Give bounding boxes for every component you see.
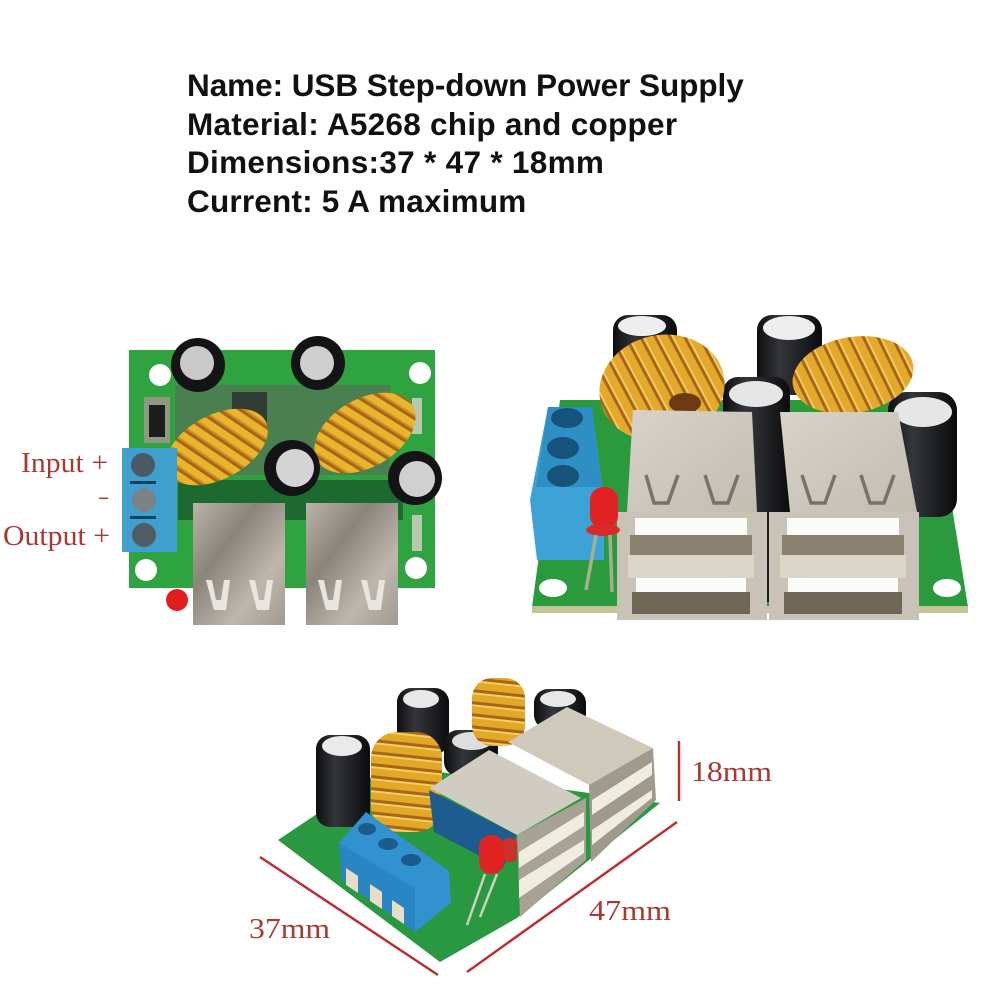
panel: front view board photo [530, 315, 968, 620]
pin labels: Output + [3, 521, 110, 552]
pin labels [3, 448, 110, 552]
green circuit board [129, 350, 435, 588]
pin labels: Input + [21, 448, 108, 479]
red LED [166, 589, 188, 611]
title: product specifications [187, 67, 744, 218]
capacitors [613, 315, 957, 602]
title: product specifications: Material: A5268 chip and copper [187, 106, 677, 142]
panel: top-down board photo [3, 336, 442, 625]
title: product specifications: Current: 5 A maximum [187, 182, 526, 218]
USB ports [430, 707, 656, 917]
toroid coils [153, 376, 430, 501]
title: product specifications: Dimensions:37 * 47 * 18mm [187, 144, 604, 180]
dimension label: 18mm: 18mm [691, 757, 772, 788]
dimension line: height [678, 741, 680, 801]
green circuit board [278, 765, 660, 962]
capacitors [316, 688, 586, 827]
panel: angled board photo [249, 678, 772, 975]
green circuit board [532, 400, 968, 613]
USB ports [193, 503, 398, 625]
capacitors (rear) [171, 336, 345, 392]
dimension label: 37mm: 37mm [249, 914, 330, 945]
blue terminal block [122, 448, 177, 552]
USB ports [617, 410, 919, 620]
blue chip board behind ports [429, 790, 517, 868]
title: product specifications: Name: USB Step-down Power Supply [187, 67, 744, 103]
blue terminal block [530, 407, 604, 560]
dimension line: width 47mm [467, 822, 677, 972]
dimension line: depth 37mm [260, 857, 438, 975]
blue terminal block [339, 812, 451, 932]
pin labels: – [98, 481, 109, 512]
red LED [586, 487, 620, 592]
toroid coils [371, 678, 525, 832]
capacitors (front) [264, 440, 442, 505]
toroid coils [589, 323, 920, 453]
dimension label: 47mm: 47mm [589, 896, 671, 927]
red LED [467, 835, 517, 925]
